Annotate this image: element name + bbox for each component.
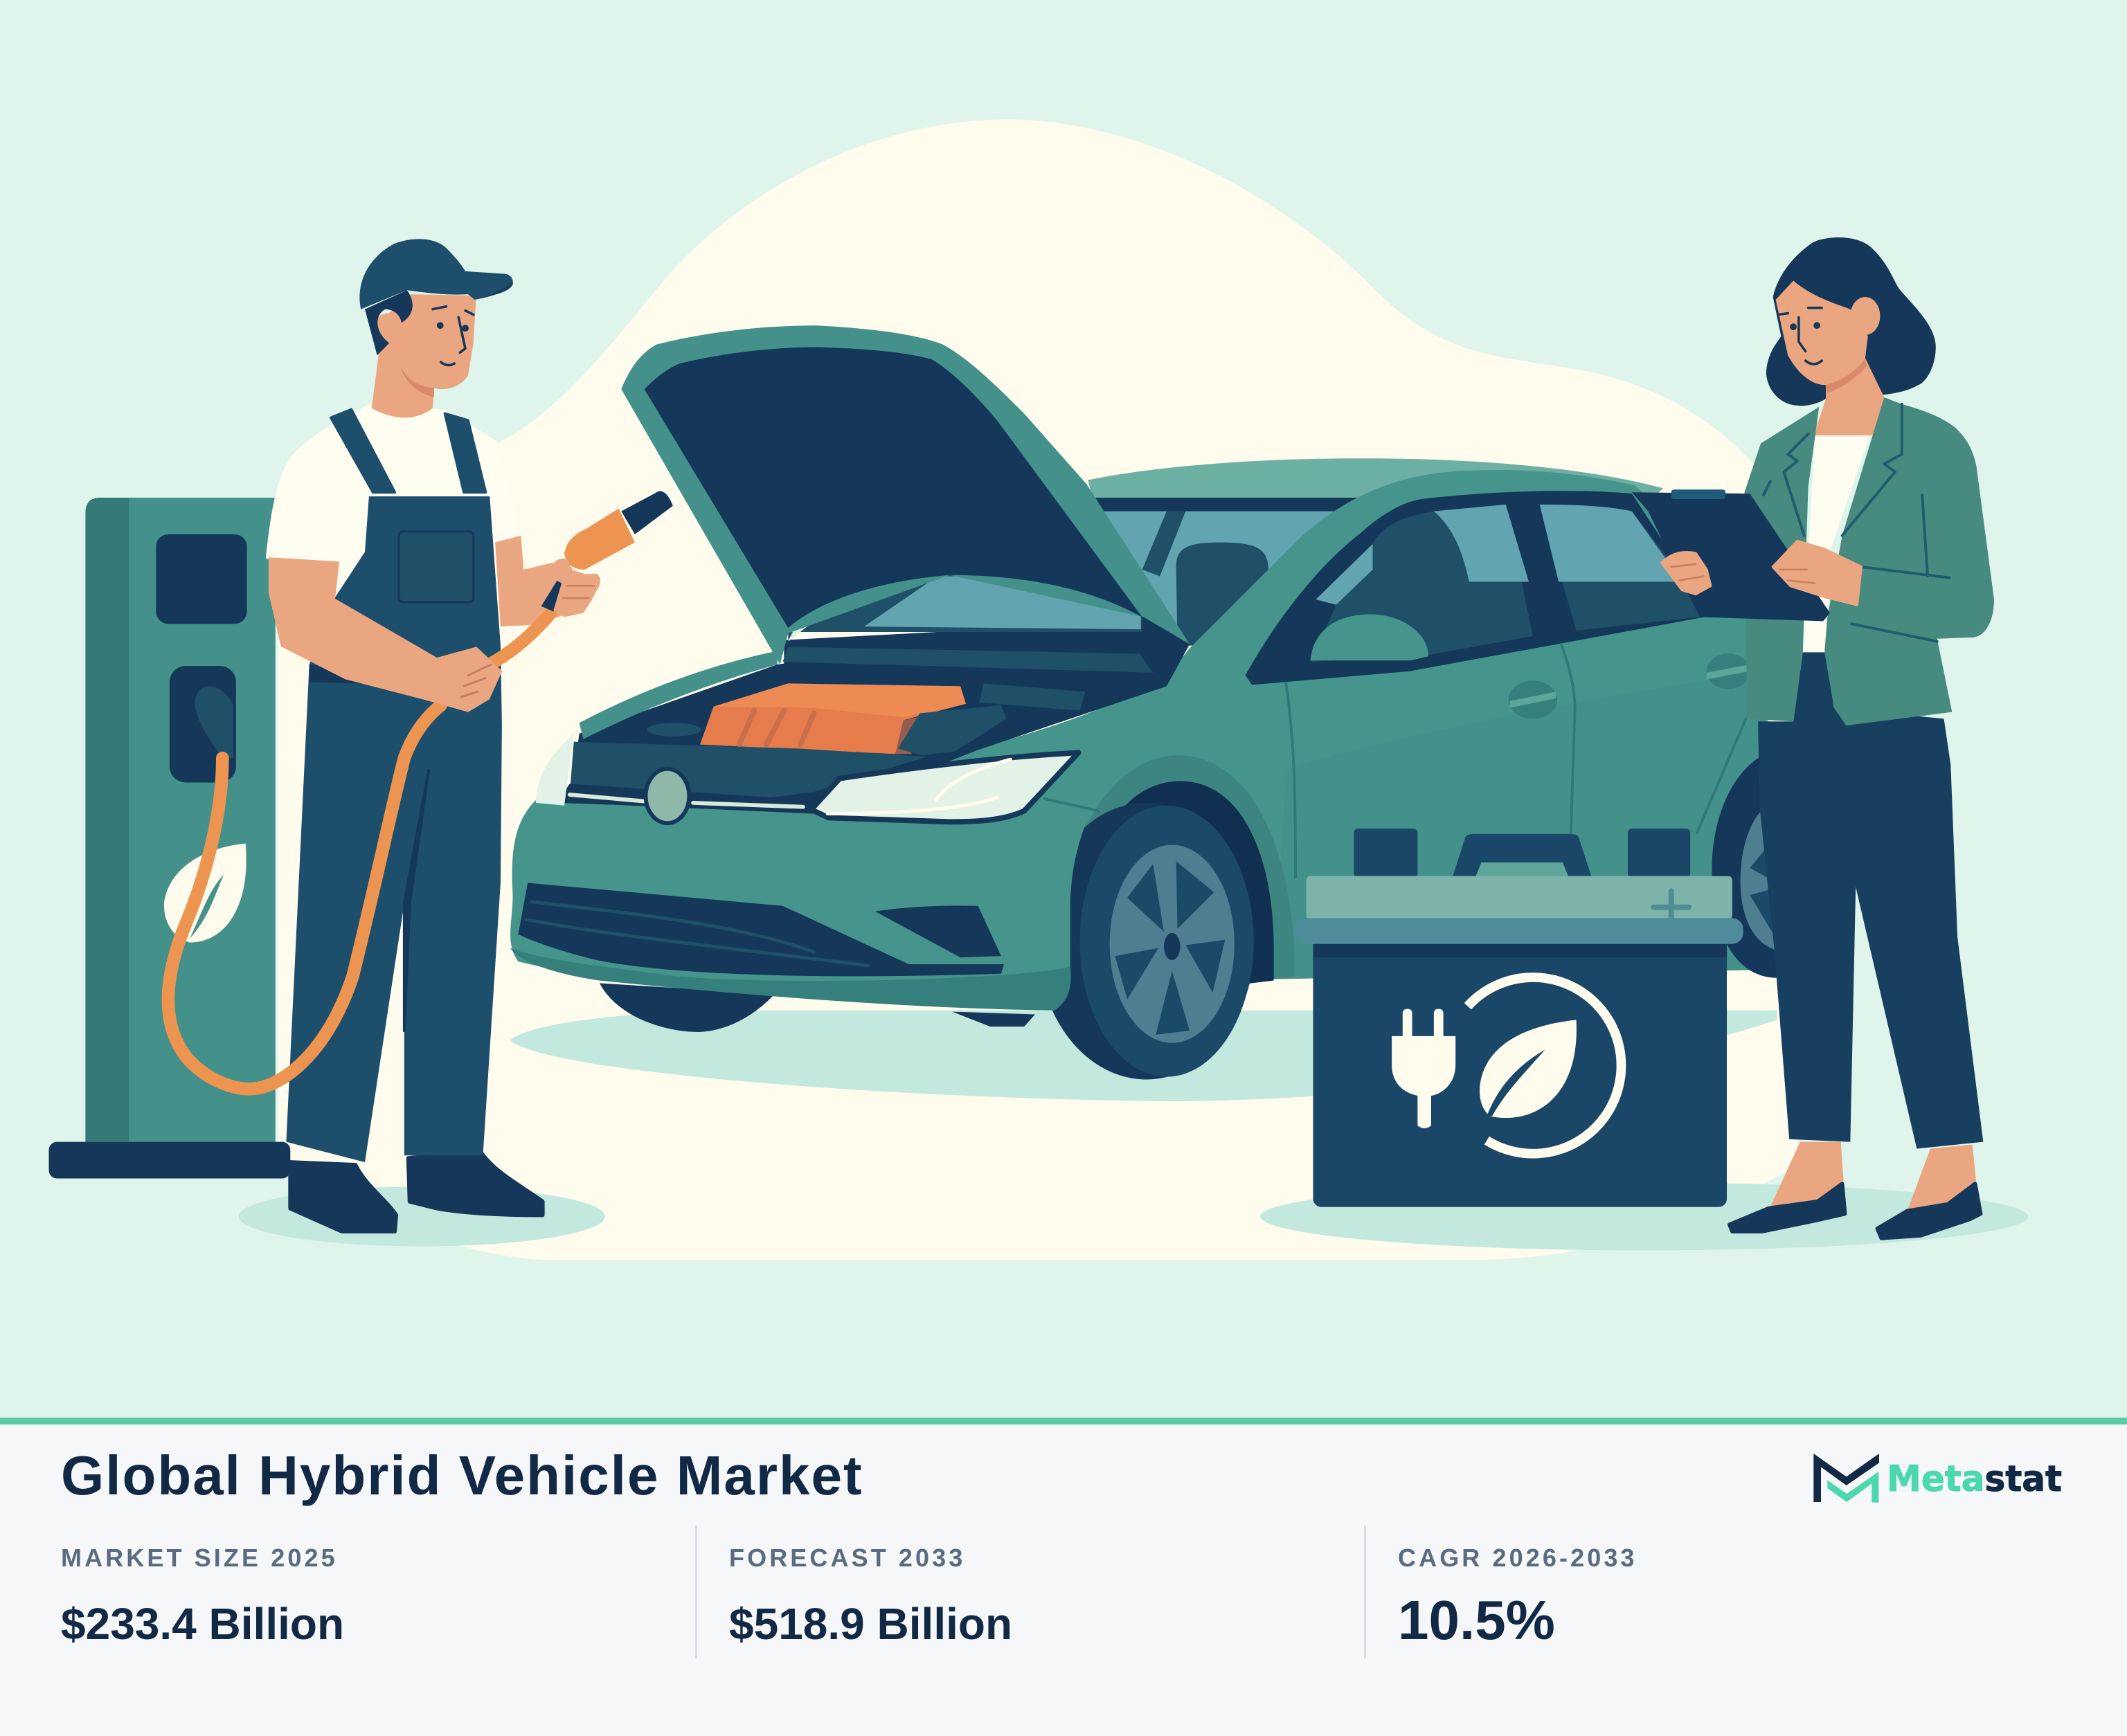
left arm bbox=[270, 559, 501, 711]
t-shirt bbox=[266, 404, 521, 599]
neck bbox=[1813, 358, 1884, 435]
face bbox=[1776, 281, 1880, 393]
logo: Metastat bbox=[1813, 1454, 2062, 1503]
far side roof bbox=[1088, 458, 1663, 522]
far side window bbox=[1093, 498, 1370, 648]
man front shoe bbox=[290, 1162, 396, 1231]
stat value: 10.5% bbox=[1398, 1589, 1555, 1651]
grille panel bbox=[570, 742, 926, 806]
front underside tire bbox=[600, 983, 775, 1032]
ankles bbox=[1770, 1142, 1977, 1211]
fog light bbox=[875, 905, 1001, 957]
battery terminals bbox=[1354, 829, 1417, 878]
jacket bbox=[1745, 397, 1994, 725]
man: mechanic bbox=[168, 239, 673, 1231]
ground shadow: man bbox=[239, 1186, 605, 1247]
charging station bbox=[49, 498, 290, 1179]
stat value: $518.9 Billion bbox=[729, 1599, 1012, 1649]
cable bbox=[168, 612, 552, 1089]
title: Global Hybrid Vehicle Market bbox=[61, 1445, 863, 1506]
trousers bbox=[1758, 652, 1983, 1148]
accent bar bbox=[0, 1418, 2127, 1425]
stat value: $233.4 Billion bbox=[61, 1599, 344, 1649]
windshield under hood bbox=[788, 575, 1142, 640]
stat: forecast 2033 bbox=[729, 1544, 1012, 1649]
door lines bbox=[1045, 644, 1745, 878]
stat label: FORECAST 2033 bbox=[729, 1544, 965, 1572]
battery handle bbox=[1453, 834, 1591, 876]
stat label: MARKET SIZE 2025 bbox=[61, 1544, 338, 1572]
nozzle bbox=[541, 491, 673, 612]
overalls bbox=[286, 496, 502, 1162]
right headlight bbox=[811, 752, 1079, 822]
left hand finger lines bbox=[461, 664, 491, 697]
icon: ring bbox=[1468, 977, 1622, 1154]
cream blob backdrop bbox=[278, 119, 1797, 1260]
engine parts bbox=[898, 705, 1007, 755]
stat: CAGR 2026-2033 bbox=[1398, 1544, 1637, 1651]
illustration: hybrid vehicle service scene bbox=[49, 119, 2028, 1260]
ground shadow: car bbox=[510, 1011, 1777, 1101]
ground shadow: woman and battery bbox=[1260, 1182, 2028, 1250]
door lower tone bbox=[1275, 671, 1770, 979]
front wheel bbox=[1038, 803, 1255, 1080]
right hand bbox=[547, 559, 600, 617]
woman: inspector bbox=[1632, 237, 1994, 1238]
man back shoe bbox=[409, 1151, 543, 1215]
right forearm bbox=[495, 536, 600, 626]
trouser shading bbox=[404, 770, 429, 1031]
rear wheel bbox=[1712, 750, 1777, 978]
blouse bbox=[1803, 437, 1869, 652]
overall straps bbox=[331, 410, 485, 492]
bottom info panel bbox=[0, 1425, 2127, 1736]
clipboard bbox=[1632, 489, 1830, 621]
door handles bbox=[1509, 653, 1750, 718]
logo wordmark: Metastat bbox=[1887, 1458, 2062, 1500]
front panel strip bbox=[580, 651, 778, 739]
shoes bbox=[1730, 1184, 1980, 1238]
battery bbox=[1294, 829, 1743, 1207]
hood bbox=[621, 325, 1190, 664]
car bbox=[510, 325, 1777, 1080]
icon: plug bbox=[1392, 1009, 1455, 1128]
icon: leaf bbox=[1480, 1020, 1577, 1118]
dividers bbox=[695, 1526, 697, 1658]
wheel arch bbox=[1052, 755, 1294, 1004]
engine cover bbox=[700, 683, 966, 754]
hair bbox=[1766, 237, 1936, 406]
engine bay bbox=[570, 613, 1190, 814]
bumper lower band bbox=[510, 948, 1071, 1011]
neck bbox=[372, 355, 434, 417]
lower grille bbox=[518, 883, 1004, 976]
cowl bbox=[784, 621, 1147, 678]
stat: market size 2025 bbox=[61, 1544, 344, 1649]
bumper corner over tire bbox=[1011, 803, 1093, 1011]
side windows bbox=[1246, 491, 1712, 685]
stat label: CAGR 2026-2033 bbox=[1398, 1544, 1637, 1572]
main body bbox=[510, 470, 1770, 1011]
left headlight bbox=[536, 734, 574, 806]
battery lid bbox=[1307, 876, 1732, 919]
head bbox=[359, 239, 513, 397]
bib pocket bbox=[399, 532, 474, 602]
sleeve shading bbox=[370, 506, 379, 563]
badge and chrome strips bbox=[570, 769, 803, 823]
logo mark bbox=[1813, 1454, 1879, 1503]
hands bbox=[1662, 541, 1861, 605]
